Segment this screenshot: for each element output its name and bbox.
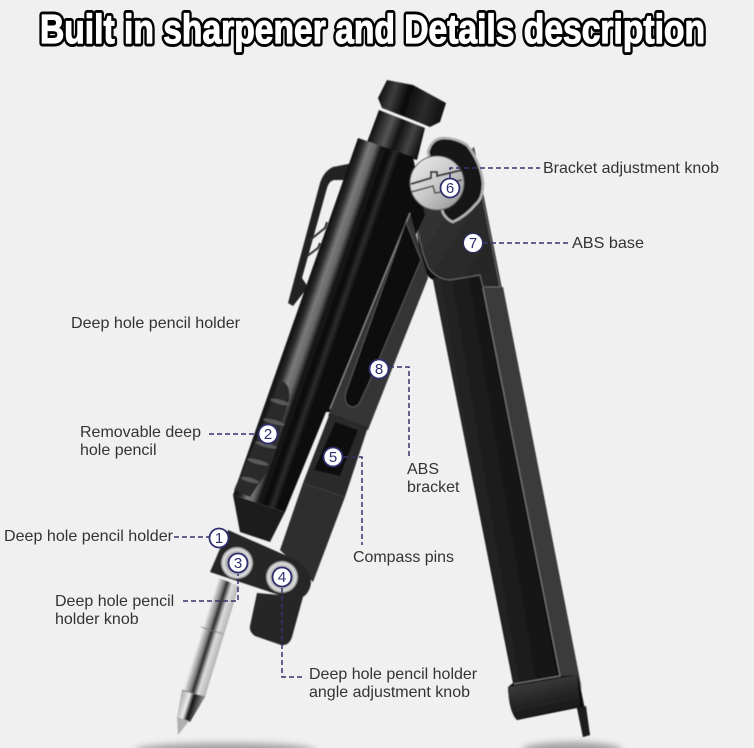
badge 3: [228, 554, 248, 572]
label: ABS base: ABS base: [572, 235, 644, 252]
label: Deep hole pencil holder knob: Deep hole pencil: [55, 593, 174, 610]
bracket box opening: [314, 422, 358, 476]
bracket slot: [345, 222, 421, 407]
badge 4: [272, 568, 292, 586]
pen lower taper: [233, 495, 285, 542]
knob 3: [221, 547, 253, 579]
label: Deep hole pencil holder (1): Deep hole pencil holder: [4, 528, 174, 545]
pen grip: [234, 381, 289, 497]
D-ring: [428, 138, 483, 222]
bracket upper arm: [328, 213, 428, 430]
badge 1: 1: [215, 530, 223, 547]
pen clip: [288, 163, 353, 306]
black gap fill between barrel and bracket: [270, 157, 425, 512]
leader lines: [174, 168, 568, 677]
pencil holder block: [210, 530, 311, 600]
label: Deep hole pencil holder angle adjustment knob: Deep hole pencil holder: [309, 666, 478, 683]
clip teeth: [306, 222, 327, 257]
ground shadows: [135, 742, 622, 748]
label: ABS bracket: bracket: [407, 479, 460, 496]
pen neck: [366, 110, 425, 160]
badge 7: [464, 234, 482, 252]
badge 7: 7: [469, 235, 477, 252]
ABS base leg: [411, 147, 590, 737]
badge 8: [370, 360, 388, 378]
label: Removable deep hole pencil: Removable deep: [80, 424, 201, 441]
grip ridges: [241, 397, 290, 484]
label: Compass pins: Compass pins: [353, 549, 454, 566]
badge 5: [324, 448, 342, 466]
pen body: [233, 80, 446, 542]
label: Deep hole pencil holder angle adjustment knob: angle adjustment knob: [309, 684, 470, 701]
bracket adjustment knob: [410, 156, 464, 210]
badge 6: [440, 178, 460, 198]
badge 8: 8: [375, 361, 383, 378]
label: Deep hole pencil holder: Deep hole pencil holder: [71, 315, 241, 332]
base top plate: [411, 149, 500, 287]
badge 2: 2: [264, 426, 272, 443]
label: Bracket adjustment knob: Bracket adjustment knob: [543, 160, 719, 177]
badge 3: 3: [234, 555, 242, 572]
base foot: [508, 675, 580, 720]
badge 6: 6: [446, 180, 454, 197]
bracket left rim: [330, 213, 410, 409]
pen cap: [378, 80, 446, 127]
badge 2: [258, 424, 278, 444]
pen barrel: [233, 138, 413, 512]
bracket lower arm: [280, 483, 345, 582]
base inner channel: [433, 273, 557, 684]
badge 5: 5: [329, 449, 337, 466]
base outer rail: [480, 273, 582, 690]
ABS bracket: [280, 213, 428, 582]
metal needle: [177, 578, 239, 735]
label: Deep hole pencil holder knob: holder knob: [55, 611, 139, 628]
label: Removable deep hole pencil: hole pencil: [80, 442, 156, 459]
illustration: compass tool: [177, 80, 590, 737]
lower flap: [250, 593, 303, 645]
badge 1: [210, 528, 228, 548]
base pin: [577, 706, 590, 737]
badge 4: 4: [278, 569, 286, 586]
bracket middle box: [303, 413, 368, 497]
label: ABS bracket: ABS: [407, 461, 439, 478]
base channel rim: [483, 288, 560, 684]
knob 4: [266, 561, 298, 593]
